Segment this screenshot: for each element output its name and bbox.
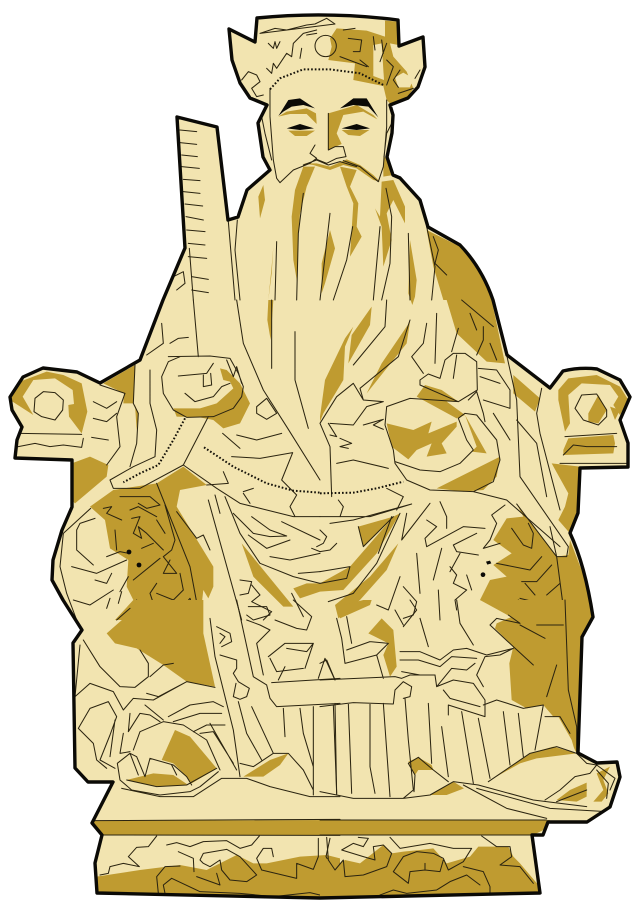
right armrest shadows — [552, 375, 628, 533]
hat shadow — [328, 21, 413, 103]
eyebrows and eyes — [278, 98, 378, 130]
face lines — [262, 89, 392, 183]
small black marks — [486, 561, 491, 565]
face shadows — [278, 105, 393, 182]
left knee and hand shadows — [90, 368, 320, 620]
robe hem dots — [123, 418, 185, 482]
plinth band right — [320, 820, 550, 835]
hat lines — [242, 18, 420, 97]
right hand shadows — [387, 385, 500, 492]
beard shadows — [258, 167, 493, 305]
right sleeve shadows — [320, 300, 540, 422]
throne and armrest shadows — [10, 300, 273, 503]
lap lines — [208, 495, 320, 620]
left leg lines — [75, 640, 340, 797]
black dot — [481, 572, 485, 577]
right knee shadow continuation — [480, 600, 597, 753]
base shadow — [97, 855, 340, 903]
base shadow right — [320, 845, 543, 903]
cream patch at right leg — [533, 717, 575, 752]
left torso and knee — [10, 300, 320, 620]
beard lines — [160, 188, 447, 300]
chest lines — [183, 398, 320, 517]
knee lines — [60, 483, 210, 620]
plinth band — [90, 820, 340, 835]
knee shadow continuation — [107, 600, 215, 687]
base lines — [100, 836, 340, 897]
base lines right — [327, 836, 533, 895]
plinth lines right — [320, 820, 547, 835]
hat band dots — [270, 69, 383, 89]
chest dots right — [320, 482, 403, 493]
lower left: foot and plinth — [75, 600, 340, 903]
centre panel lines — [210, 600, 340, 795]
left armrest lines — [18, 385, 125, 465]
chest dots — [204, 447, 320, 493]
lower right: foot and plinth — [320, 600, 615, 903]
left knee dots — [127, 550, 141, 567]
ruler ticks — [180, 130, 208, 300]
right lap lines — [317, 500, 485, 620]
hat highlight — [373, 43, 384, 80]
foot shadow — [127, 730, 288, 787]
centre panel lines right — [320, 600, 615, 818]
right leg lines — [400, 600, 577, 753]
fruit hand lines — [385, 353, 560, 547]
right knee lines — [482, 504, 563, 600]
left sleeve lines — [110, 300, 320, 488]
robe and foot shadows — [337, 600, 610, 802]
right torso and knee — [317, 300, 628, 620]
right knee and robe shadows — [320, 504, 593, 620]
right armrest lines — [537, 388, 628, 510]
right sleeve lines — [320, 300, 568, 557]
plinth lines — [93, 783, 340, 835]
head and hat — [160, 18, 493, 305]
ear ornament — [395, 73, 413, 87]
